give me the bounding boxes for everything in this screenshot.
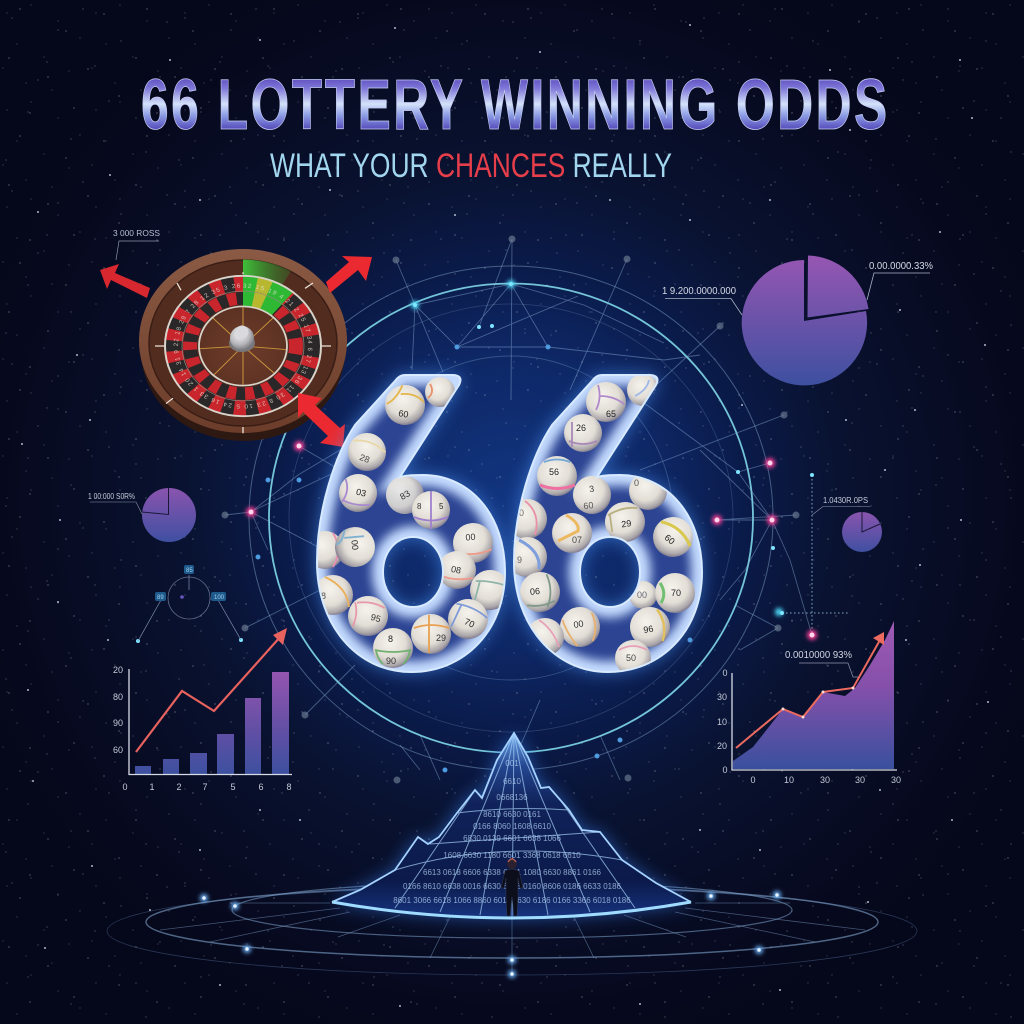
mountain digits and grid: 001: [505, 759, 519, 768]
first six: 03: [355, 487, 367, 499]
pie label left: [662, 285, 742, 315]
mountain digits and grid: 0166 8060 1608 6610: [473, 822, 551, 831]
winning green pockets: [243, 276, 293, 316]
first six: 8: [417, 502, 422, 511]
second six: 56: [549, 467, 559, 477]
second six: 70: [671, 588, 681, 598]
arrow: upper right: [326, 256, 372, 293]
bars: [135, 672, 289, 774]
second six: 60: [663, 532, 677, 546]
first six: 90: [386, 656, 396, 666]
bar chart axis labels: 60: [113, 745, 123, 755]
second six: 29: [621, 518, 632, 529]
first six: 00: [465, 532, 476, 543]
wheel hub: [229, 326, 255, 352]
arrow: upper left: [100, 264, 150, 298]
area chart axis labels: 0: [722, 668, 728, 678]
first six: 70: [463, 616, 476, 630]
bar chart axis labels: 8: [286, 782, 292, 792]
second six: [507, 374, 702, 676]
small pie left: 1 00:000 S0R%: [88, 492, 135, 501]
pie label right: 0.00.0000.33%: [869, 260, 933, 272]
second six: 06: [530, 586, 540, 597]
bar chart axis labels: 5: [230, 782, 236, 792]
second six: 60: [583, 500, 594, 511]
area chart axis labels: 20: [717, 741, 727, 751]
bar chart axis labels: 7: [202, 782, 208, 792]
mountain digits and grid: 8610 6630 0161: [483, 810, 541, 819]
red arrows around wheel: [100, 256, 372, 447]
outer glow: [317, 375, 702, 672]
first six: 60: [398, 408, 409, 420]
main circle rings and network: [225, 239, 850, 780]
second six: 65: [606, 409, 616, 419]
bar chart axis labels: 80: [113, 692, 123, 702]
area chart trend arrow: [736, 632, 884, 748]
small pie left: [88, 488, 196, 542]
small node diagram: 85: [186, 568, 193, 574]
bar chart axis labels: 2: [176, 782, 182, 792]
mountain digits and grid: 6610: [503, 777, 521, 786]
large pie chart: [742, 256, 868, 385]
area chart: [717, 621, 901, 785]
mountain digits and grid: 6830 0139 6601 6638 1066: [463, 834, 561, 843]
mountain digits and grid: 0668136: [496, 793, 528, 802]
first six: 8: [321, 591, 326, 601]
pie label left: 1 9.200.0000.000: [662, 285, 736, 297]
area chart axis labels: [717, 668, 901, 785]
pie highlighted slice: [808, 256, 868, 318]
second six: 9: [517, 555, 522, 565]
title: 66 LOTTERY WINNING ODDS: [141, 65, 887, 144]
bar chart axis labels: [113, 665, 292, 792]
second six: 0: [634, 478, 639, 488]
area chart axis labels: 10: [717, 717, 727, 727]
small pie right: [812, 496, 882, 552]
roulette label: [113, 228, 160, 260]
second six: 3: [588, 484, 595, 494]
area chart axis labels: 0: [722, 765, 728, 775]
floor rings: [107, 882, 917, 975]
first six: 5: [439, 502, 444, 511]
arrow: double lower right: [298, 393, 345, 447]
first six: 08: [450, 564, 462, 576]
bar chart axis labels: 20: [113, 665, 123, 675]
first six: 95: [370, 612, 382, 624]
mountain digits and grid: 8601 3066 6618 1066 8860 6011 6630 6186 0166 3366 6018 0186: [393, 896, 631, 905]
area chart axis labels: 0: [750, 775, 756, 785]
bar chart: [113, 628, 292, 792]
area chart axis labels: 30: [717, 692, 727, 702]
area chart axis labels: 30: [820, 775, 830, 785]
first six: [306, 375, 514, 672]
second six: 00: [573, 618, 584, 630]
area chart axis labels: 10: [784, 775, 794, 785]
data mountain: [332, 733, 691, 920]
second six: 96: [643, 624, 654, 635]
mountain digits and grid: 6613 0618 6606 6338 6601 1080 6630 8861 0166: [423, 868, 602, 877]
network nodes: [138, 239, 812, 780]
second six: 07: [572, 535, 582, 545]
central 66 numeral: [306, 374, 702, 676]
first six: 29: [436, 633, 446, 643]
mountain base rim: [332, 902, 691, 918]
small node diagram: [138, 565, 241, 641]
mountain digits and grid: 1608 6630 1180 6601 3368 0618 6610: [443, 851, 581, 860]
pie label right: [867, 260, 933, 300]
area chart callout: [785, 649, 858, 677]
small node diagram: 100: [214, 595, 225, 601]
second six: 0: [519, 508, 524, 518]
roulette label: 3 000 ROSS: [113, 228, 160, 238]
second six: 50: [626, 653, 636, 663]
bar chart axis labels: 90: [113, 718, 123, 728]
area chart callout: 0.0010000 93%: [785, 649, 852, 661]
mountain digits and grid: 0166 8610 6638 0016 6630 6618 0160 8606 0186 6633 0186: [403, 882, 622, 891]
second six: 26: [576, 423, 586, 433]
area chart axis labels: 30: [891, 775, 901, 785]
second six: 00: [637, 590, 647, 600]
small node diagram: 89: [157, 595, 164, 601]
person silhouette: [501, 859, 523, 916]
roulette wheel: [139, 249, 347, 441]
bar chart trend arrow: [136, 628, 287, 752]
bar chart axis labels: 1: [149, 782, 155, 792]
bar chart axis labels: 0: [122, 782, 128, 792]
first six: 8: [388, 634, 393, 644]
subtitle: WHAT YOUR CHANCES REALLY: [270, 147, 672, 185]
first six: 00: [349, 540, 360, 550]
floor glowing nodes: [204, 895, 777, 974]
area chart axis labels: 30: [855, 775, 865, 785]
small pie right: 1.0430R.0PS: [823, 496, 868, 505]
mountain digits and grid: [393, 733, 635, 920]
green sector on rim: [243, 260, 291, 285]
roulette wheel: 32 15 19 4 21 2 25 17 34 6 27 13 36 11 30 8 23 10 5 24 16 33 1 20 14 31 9 22 18 29 7 28 12 35 3 26: [174, 284, 312, 408]
first six: 83: [398, 488, 412, 502]
first six: 28: [358, 452, 371, 465]
bar chart axis labels: 6: [258, 782, 264, 792]
